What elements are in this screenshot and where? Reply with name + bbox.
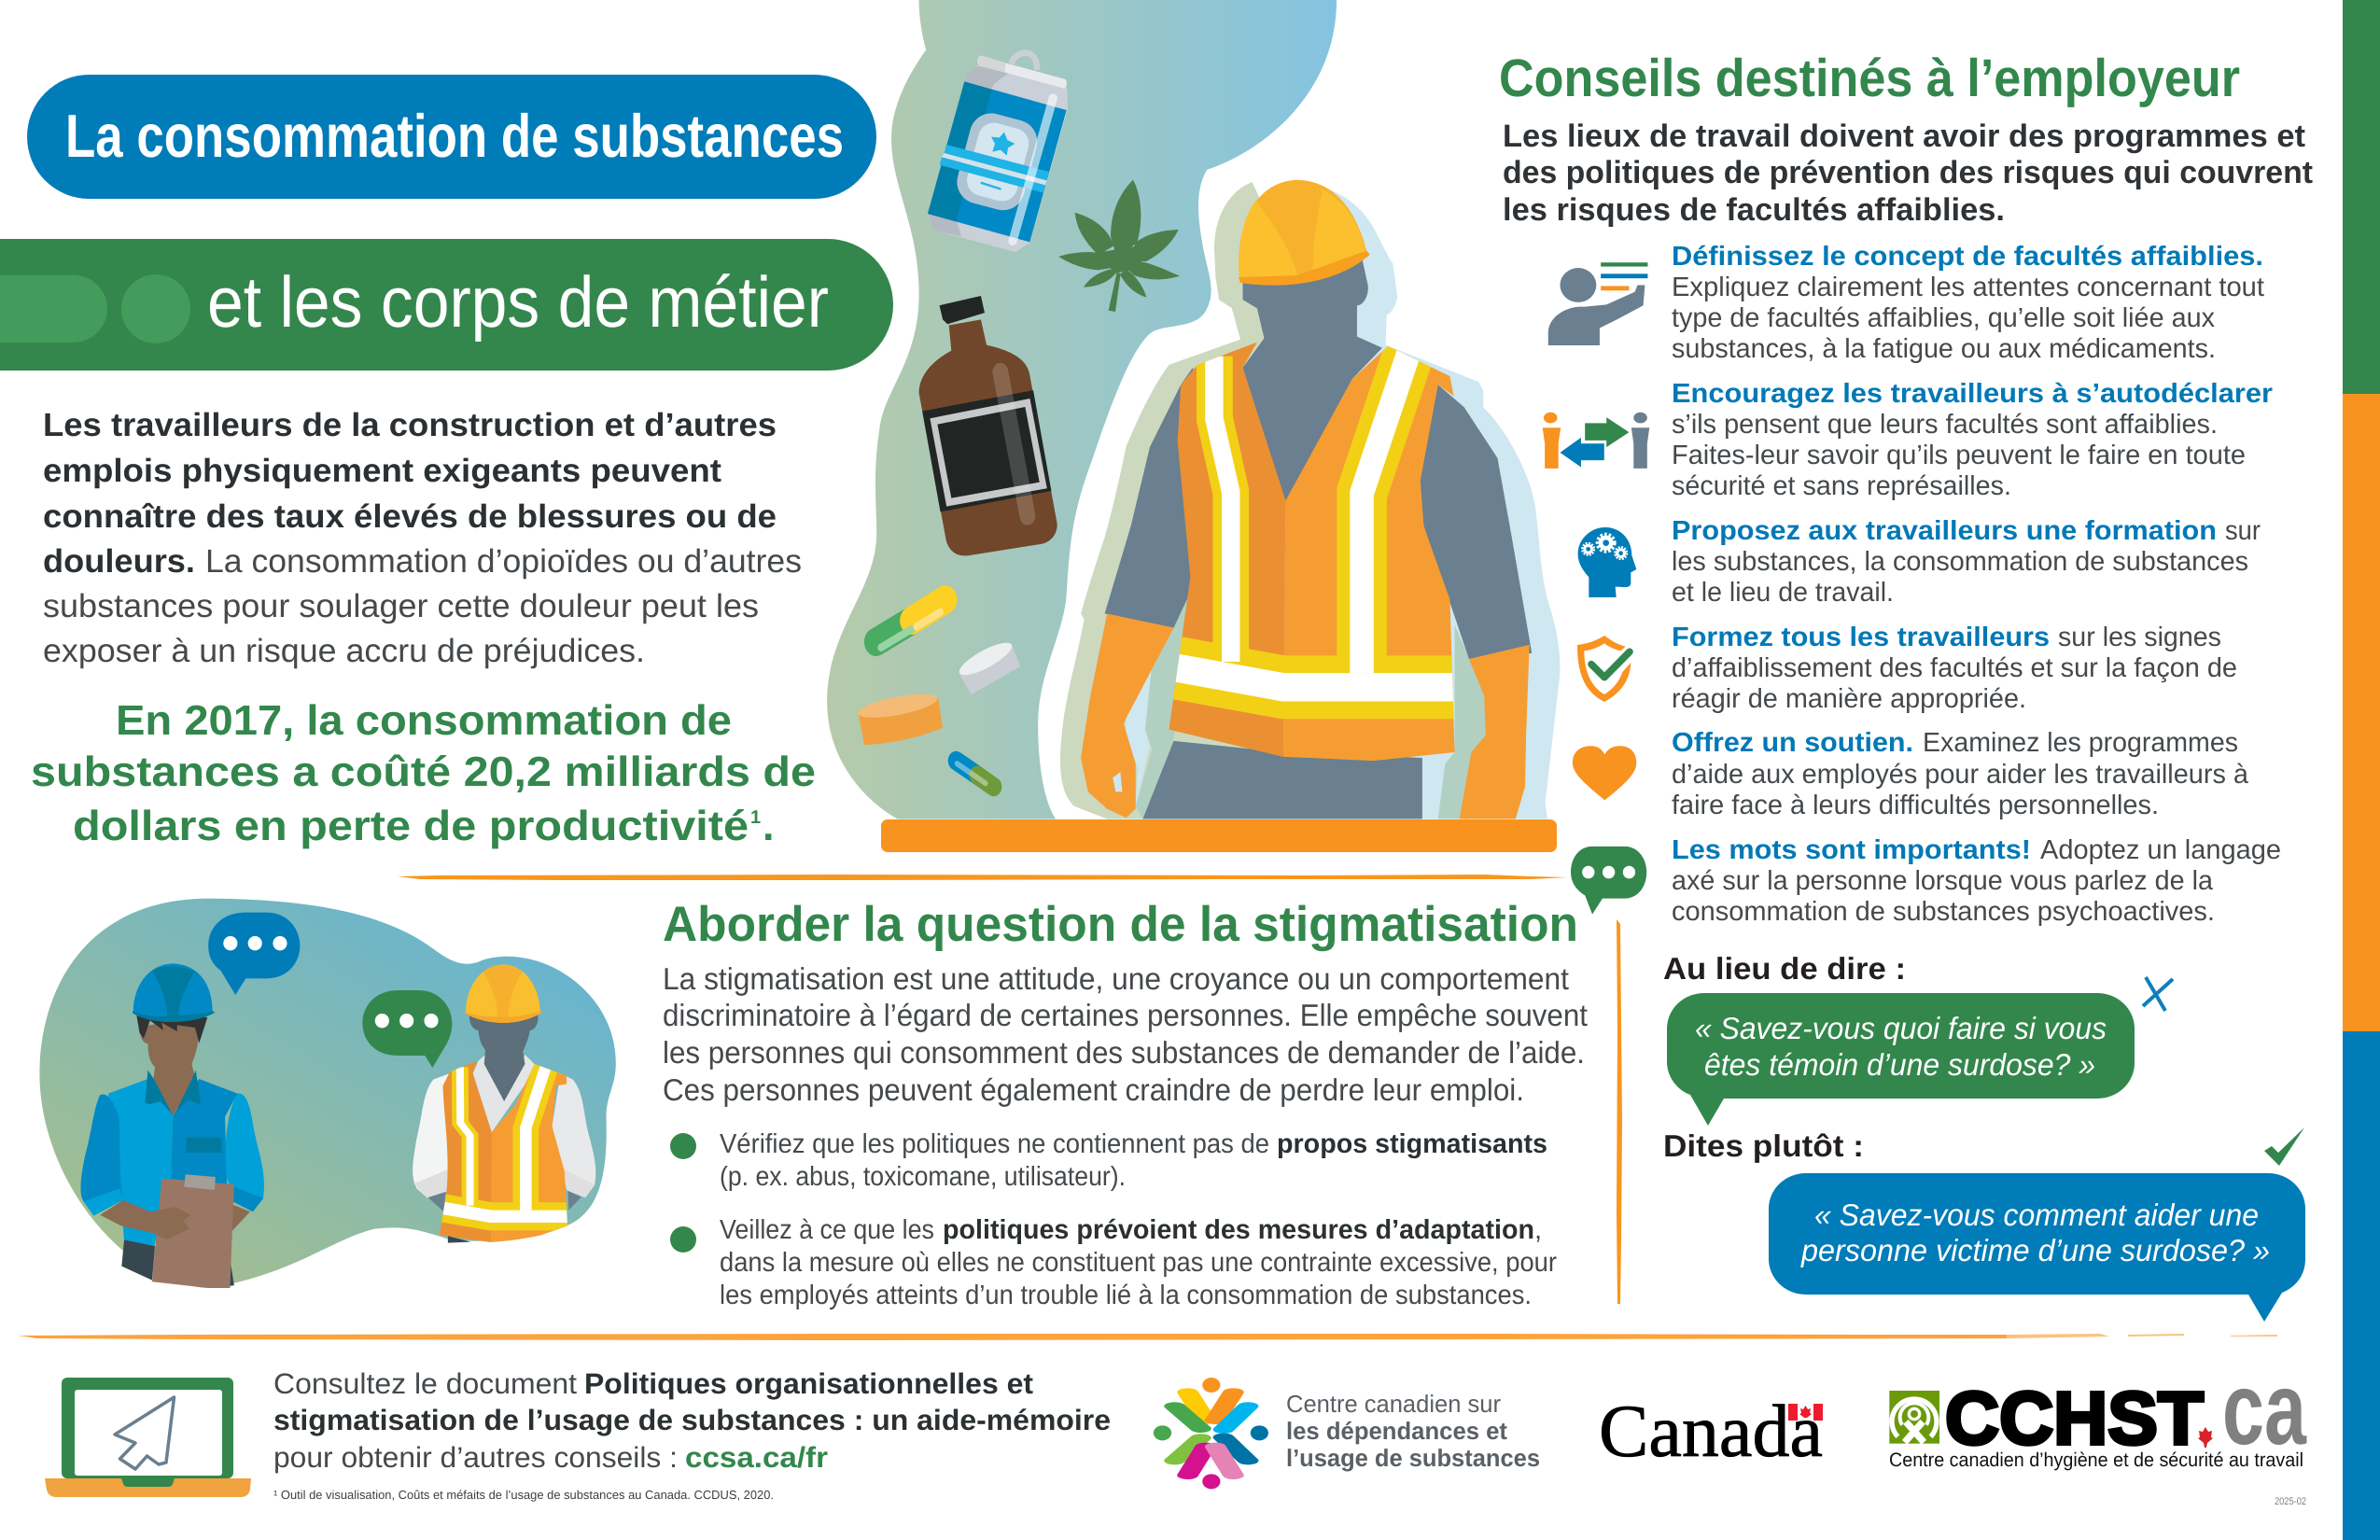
logo: CCHST xyxy=(1889,1351,2307,1471)
advice 5: Offrez un soutien. xyxy=(1672,728,1913,758)
advice 6: Adoptez un langage xyxy=(2040,835,2281,865)
gradient blob background xyxy=(827,0,1337,819)
advice 1: type de facultés affaiblies, qu’elle soit liée aux xyxy=(1672,303,2215,333)
stigma paragraph xyxy=(663,961,1588,1107)
stigma paragraph: La stigmatisation est une attitude, une croyance ou un comportement xyxy=(663,961,1569,996)
icon: laptop with cursor xyxy=(45,1378,251,1497)
text: resource link: ccsa.ca/fr xyxy=(685,1441,828,1474)
bullet 1: propos stigmatisants xyxy=(1277,1129,1547,1159)
worker with vest xyxy=(413,964,595,1243)
title: blue pill: La consommation de substances xyxy=(65,102,844,170)
advice 5: faire face à leurs difficultés personnelles. xyxy=(1672,791,2159,820)
logo: CCSA xyxy=(1154,1378,1540,1489)
intro text block xyxy=(43,407,802,669)
speech bubble: blue: « Savez-vous comment aider une xyxy=(1814,1197,2259,1232)
advice 3: Proposez aux travailleurs une formation xyxy=(1672,516,2217,546)
speech bubble: blue: personne victime d’une surdose? » xyxy=(1800,1233,2270,1267)
advice 4: sur les signes xyxy=(2058,623,2221,652)
advice 6: axé sur la personne lorsque vous parlez de la xyxy=(1672,866,2214,896)
logo: Canada wordmark: Canada xyxy=(1599,1391,1823,1473)
title: green pill: et les corps de métier xyxy=(207,262,829,343)
logo: CCSA: Centre canadien sur xyxy=(1286,1390,1501,1418)
logo: CCHST: Centre canadien d’hygiène et de sécurité au travail xyxy=(1889,1449,2303,1471)
advice 2: s’ils pensent que leurs facultés sont affaiblies. xyxy=(1672,410,2218,440)
publication date: 2025-02 xyxy=(2275,1496,2306,1507)
speech bubble: green xyxy=(1667,993,2135,1126)
bullet 1: (p. ex. abus, toxicomane, utilisateur). xyxy=(720,1162,1126,1192)
advice 2 xyxy=(1672,379,2273,501)
icon: pills xyxy=(857,599,1020,787)
speech bubble: blue xyxy=(208,913,300,995)
advice 2: sécurité et sans représailles. xyxy=(1672,471,2011,501)
bullet 2: dans la mesure où elles ne constituent pas une contrainte excessive, pour xyxy=(720,1248,1557,1278)
advice 1: Expliquez clairement les attentes concernant tout xyxy=(1672,273,2264,302)
side colour band xyxy=(2343,0,2380,1540)
advice 6: consommation de substances psychoactives. xyxy=(1672,897,2215,927)
logo: CCHST: ca xyxy=(2222,1351,2307,1466)
label: say instead: Dites plutôt : xyxy=(1663,1128,1864,1163)
panel: two workers talking xyxy=(39,899,616,1288)
text: resource link xyxy=(273,1367,1111,1474)
advice 3: sur xyxy=(2225,516,2261,546)
worker with clipboard xyxy=(80,963,264,1288)
advice 3 xyxy=(1672,516,2261,608)
advice 6: Les mots sont importants! xyxy=(1672,835,2031,865)
gradient blob background xyxy=(39,899,616,1288)
stigma paragraph: les personnes qui consomment des substances de demander de l’aide. xyxy=(663,1035,1585,1070)
icon: speech bubble xyxy=(1571,847,1646,915)
speech bubble: green: « Savez-vous quoi faire si vous xyxy=(1695,1011,2107,1045)
advice 4: Formez tous les travailleurs xyxy=(1672,623,2050,652)
speech bubble: green xyxy=(362,990,452,1068)
icon: green check xyxy=(2264,1127,2304,1166)
icon: cannabis leaf xyxy=(1058,180,1180,312)
advice 4: d’affaiblissement des facultés et sur la façon de xyxy=(1672,653,2237,683)
bullet 2: les employés atteints d’un trouble lié à la consommation de substances. xyxy=(720,1281,1532,1310)
icon: head with gears xyxy=(1578,527,1636,597)
intro text block: La consommation d’opioïdes ou d’autres xyxy=(205,543,802,580)
statistic callout: . xyxy=(763,802,775,849)
orange counter bar xyxy=(881,819,1557,852)
title: green pill xyxy=(0,239,893,371)
advice 4: réagir de manière appropriée. xyxy=(1672,684,2026,714)
statistic callout: 1 xyxy=(750,807,761,828)
bullet 2 xyxy=(670,1215,1557,1310)
intro text block: exposer à un risque accru de préjudices. xyxy=(43,633,645,669)
speech bubble: green: êtes témoin d’une surdose? » xyxy=(1704,1047,2095,1082)
advice 1: substances, à la fatigue ou aux médicaments. xyxy=(1672,334,2216,364)
icon: presenter xyxy=(1548,262,1647,345)
logo: CCHST: CCHST xyxy=(1945,1377,2204,1460)
advice 6 xyxy=(1672,835,2281,927)
stigma paragraph: discriminatoire à l’égard de certaines personnes. Elle empêche souvent xyxy=(663,998,1588,1032)
advice 5 xyxy=(1672,728,2249,820)
text: resource link: pour obtenir d’autres conseils : xyxy=(273,1441,678,1474)
speech bubble: blue xyxy=(1769,1173,2305,1322)
icon: heart xyxy=(1573,746,1636,800)
employer intro text: Les lieux de travail doivent avoir des programmes et xyxy=(1503,119,2305,154)
heading: employer advice: Conseils destinés à l’employeur xyxy=(1499,49,2240,108)
title: blue pill xyxy=(27,75,876,199)
panel: hero illustration xyxy=(827,0,1560,819)
advice 1 xyxy=(1672,242,2264,364)
intro text block: Les travailleurs de la construction et d’autres xyxy=(43,407,777,443)
advice 5: d’aide aux employés pour aider les travailleurs à xyxy=(1672,760,2249,790)
statistic callout: dollars en perte de productivité xyxy=(73,802,749,849)
bullet 2: , xyxy=(1534,1215,1542,1245)
icon: beer can xyxy=(928,53,1068,252)
intro text block: connaître des taux élevés de blessures ou de xyxy=(43,498,777,535)
stigma paragraph: Ces personnes peuvent également craindre de perdre leur emploi. xyxy=(663,1072,1524,1107)
advice 2: Faites-leur savoir qu’ils peuvent le faire en toute xyxy=(1672,441,2246,470)
text: resource link: stigmatisation de l’usage de substances : un aide-mémoire xyxy=(273,1404,1111,1436)
statistic callout: substances a coûté 20,2 milliards de xyxy=(31,748,816,795)
icon: medicine bottle xyxy=(919,296,1057,555)
advice 1: Définissez le concept de facultés affaiblies. xyxy=(1672,242,2263,272)
bullet 1: Vérifiez que les politiques ne contiennent pas de xyxy=(720,1129,1269,1159)
text: resource link: Politiques organisationnelles et xyxy=(584,1367,1033,1400)
statistic callout: En 2017, la consommation de xyxy=(116,696,732,744)
statistic callout xyxy=(31,696,816,849)
advice 3: et le lieu de travail. xyxy=(1672,578,1894,608)
advice 3: les substances, la consommation de substances xyxy=(1672,547,2248,577)
advice 2: Encouragez les travailleurs à s’autodéclarer xyxy=(1672,379,2273,409)
bullet 1 xyxy=(670,1129,1547,1192)
footnote: ¹ Outil de visualisation, Coûts et méfaits de l’usage de substances au Canada. CCDUS, 2020. xyxy=(273,1488,774,1502)
intro text block: substances pour soulager cette douleur peut les xyxy=(43,588,759,624)
intro text block: douleurs. xyxy=(43,543,195,580)
employer intro text: les risques de facultés affaiblies. xyxy=(1503,192,2005,228)
label: instead of saying: Au lieu de dire : xyxy=(1663,951,1906,986)
icon: blue cross xyxy=(2143,977,2173,1011)
icon: shield with check xyxy=(1577,636,1631,702)
employer intro text xyxy=(1503,119,2313,228)
logo: CCSA: l’usage de substances xyxy=(1286,1444,1540,1472)
logo: CCSA: les dépendances et xyxy=(1286,1417,1507,1445)
panel: advice list icons xyxy=(1543,262,1649,915)
advice 4 xyxy=(1672,623,2237,714)
text: resource link: Consultez le document xyxy=(273,1367,577,1400)
worker figure xyxy=(1060,180,1560,819)
advice 5: Examinez les programmes xyxy=(1923,728,2238,758)
heading: stigma: Aborder la question de la stigmatisation xyxy=(663,897,1578,952)
bullet 2: Veillez à ce que les xyxy=(720,1215,934,1245)
brushed orange dividers xyxy=(19,875,2277,1340)
employer intro text: des politiques de prévention des risques qui couvrent xyxy=(1503,155,2313,190)
icon: two-way report arrows xyxy=(1543,413,1649,469)
intro text block: emplois physiquement exigeants peuvent xyxy=(43,453,721,489)
bullet 2: politiques prévoient des mesures d’adaptation xyxy=(943,1215,1534,1245)
